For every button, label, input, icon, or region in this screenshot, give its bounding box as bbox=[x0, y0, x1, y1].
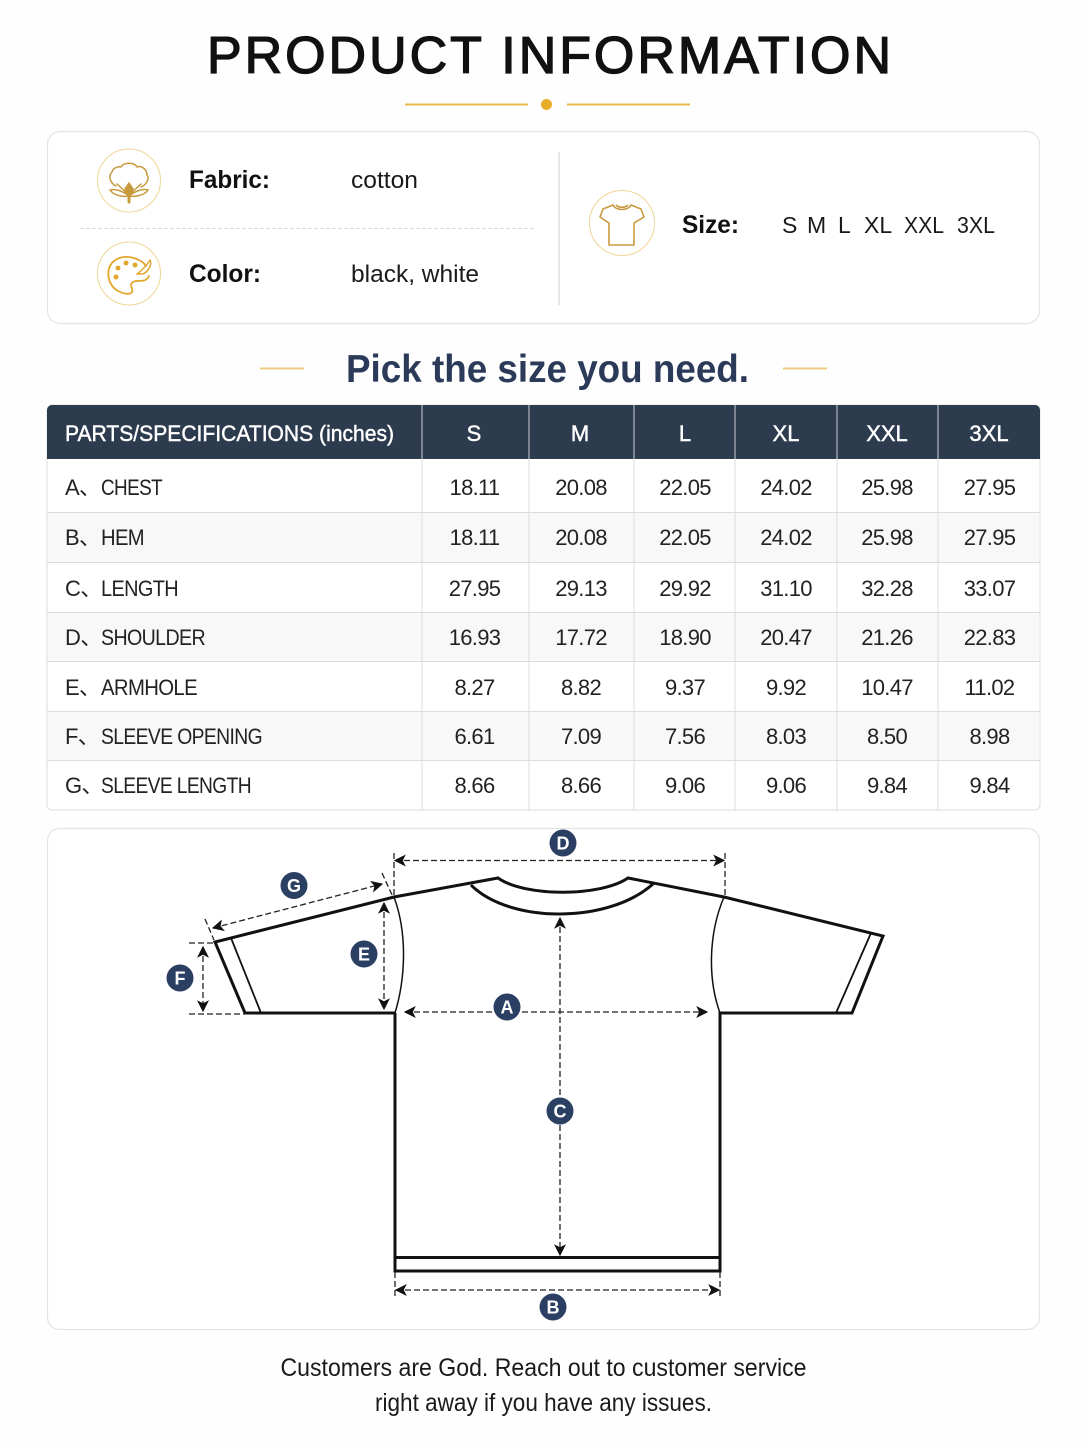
row: armhole: E、 bbox=[65, 675, 100, 700]
row: armhole: 10.47 bbox=[861, 675, 913, 700]
color label: Color: bbox=[189, 260, 261, 288]
row: chest: 24.02 bbox=[760, 475, 812, 500]
row: sleeve length: 8.66 bbox=[561, 773, 601, 798]
row: shoulder: 20.47 bbox=[760, 625, 812, 650]
row: hem: HEM bbox=[101, 525, 144, 550]
row: sleeve opening: 6.61 bbox=[454, 724, 495, 749]
dimension G: sleeve length bbox=[205, 872, 393, 940]
size values: XXL bbox=[904, 212, 944, 238]
row: hem: 24.02 bbox=[760, 525, 812, 550]
row: sleeve opening: 7.09 bbox=[561, 724, 601, 749]
row: armhole: 9.92 bbox=[766, 675, 806, 700]
row: chest: 22.05 bbox=[659, 475, 711, 500]
row: length: LENGTH bbox=[101, 576, 178, 601]
row: length: 32.28 bbox=[861, 576, 913, 601]
row: armhole: 11.02 bbox=[965, 675, 1015, 700]
size values: L bbox=[838, 212, 851, 238]
icon: t-shirt bbox=[590, 190, 654, 256]
row: armhole bbox=[65, 675, 1015, 700]
size values: S bbox=[782, 212, 797, 238]
row: chest: A、 bbox=[65, 475, 100, 500]
dimension G: sleeve length: G bbox=[287, 876, 301, 896]
dimension F: sleeve opening bbox=[166, 943, 245, 1014]
row: sleeve length: 9.06 bbox=[665, 773, 705, 798]
table row shading and grid bbox=[47, 459, 1040, 810]
row: hem: 25.98 bbox=[861, 525, 913, 550]
row: hem: 22.05 bbox=[659, 525, 711, 550]
size values: 3XL bbox=[957, 212, 995, 238]
size values: M bbox=[807, 212, 826, 238]
row: chest: 25.98 bbox=[861, 475, 913, 500]
footer note bbox=[280, 1354, 806, 1417]
heading: pick the size: Pick the size you need. bbox=[346, 348, 749, 391]
row: shoulder: 18.90 bbox=[659, 625, 711, 650]
panel: t-shirt diagram bbox=[48, 828, 1040, 1330]
row: sleeve length: 9.84 bbox=[867, 773, 907, 798]
dimension E: armhole: E bbox=[358, 944, 370, 964]
row: chest: 27.95 bbox=[964, 475, 1016, 500]
row: length: 31.10 bbox=[760, 576, 812, 601]
dimension D: shoulder: D bbox=[556, 834, 570, 854]
row: sleeve opening bbox=[65, 724, 1010, 749]
size label: Size: bbox=[682, 211, 739, 239]
row: sleeve opening: 7.56 bbox=[665, 724, 705, 749]
size table bbox=[47, 405, 1040, 810]
row: chest: 20.08 bbox=[555, 475, 607, 500]
table header row: L bbox=[679, 421, 691, 446]
row: armhole: ARMHOLE bbox=[101, 675, 197, 700]
row: shoulder: 22.83 bbox=[964, 625, 1016, 650]
dimension A: chest bbox=[405, 994, 707, 1020]
size values bbox=[782, 212, 995, 238]
table header row: 3XL bbox=[969, 421, 1009, 446]
row: sleeve length: 9.84 bbox=[969, 773, 1010, 798]
title divider ornament bbox=[405, 99, 690, 110]
row: length: C、 bbox=[65, 576, 102, 601]
row: shoulder: SHOULDER bbox=[101, 625, 205, 650]
row: length: 29.92 bbox=[659, 576, 711, 601]
size values: XL bbox=[864, 212, 892, 238]
row: sleeve length bbox=[65, 773, 1010, 798]
row: sleeve opening: SLEEVE OPENING bbox=[101, 724, 262, 749]
row: shoulder bbox=[65, 625, 1016, 650]
dimension F: sleeve opening: F bbox=[174, 968, 186, 988]
row: length: 33.07 bbox=[964, 576, 1016, 601]
row: sleeve opening: 8.50 bbox=[867, 724, 907, 749]
row: hem: 20.08 bbox=[555, 525, 607, 550]
footer note: Customers are God. Reach out to customer service bbox=[280, 1354, 806, 1382]
icon: palette bbox=[98, 242, 160, 305]
row: armhole: 9.37 bbox=[665, 675, 705, 700]
dimension C: length: C bbox=[554, 1102, 566, 1122]
row: armhole: 8.82 bbox=[561, 675, 601, 700]
row: shoulder: 21.26 bbox=[861, 625, 913, 650]
table header row bbox=[47, 405, 1040, 459]
row: hem: B、 bbox=[65, 525, 100, 550]
dimension E: armhole bbox=[350, 903, 384, 1009]
row: hem: 18.11 bbox=[450, 525, 500, 550]
icon: cotton bbox=[98, 149, 160, 212]
row: sleeve length: 8.66 bbox=[454, 773, 495, 798]
dimension B: hem bbox=[395, 1272, 720, 1320]
row: shoulder: 17.72 bbox=[555, 625, 607, 650]
table header row: XXL bbox=[866, 421, 908, 446]
table header row: XL bbox=[773, 421, 799, 446]
fabric label: Fabric: bbox=[189, 166, 270, 194]
footer note: right away if you have any issues. bbox=[375, 1389, 712, 1417]
row: sleeve opening: 8.03 bbox=[766, 724, 806, 749]
row: chest: CHEST bbox=[101, 475, 162, 500]
row: length: 29.13 bbox=[555, 576, 607, 601]
panel: product attributes bbox=[48, 132, 1040, 324]
row: sleeve length: 9.06 bbox=[766, 773, 806, 798]
row: sleeve length: G、 bbox=[65, 773, 103, 798]
t-shirt outline bbox=[215, 878, 883, 1271]
title: PRODUCT INFORMATION bbox=[207, 27, 891, 85]
row: shoulder: D、 bbox=[65, 625, 102, 650]
row: sleeve opening: F、 bbox=[65, 724, 99, 749]
dimension D: shoulder bbox=[394, 830, 725, 897]
table header row: S bbox=[467, 421, 481, 446]
row: shoulder: 16.93 bbox=[449, 625, 501, 650]
dimension A: chest: A bbox=[500, 998, 514, 1018]
row: armhole: 8.27 bbox=[454, 675, 495, 700]
row: hem bbox=[65, 525, 1016, 550]
row: chest bbox=[65, 475, 1016, 500]
row: length: 27.95 bbox=[449, 576, 501, 601]
fabric value: cotton bbox=[351, 167, 418, 194]
color value: black, white bbox=[351, 261, 479, 288]
row: chest: 18.11 bbox=[450, 475, 500, 500]
row: hem: 27.95 bbox=[964, 525, 1016, 550]
table header row: M bbox=[571, 421, 589, 446]
dimension B: hem: B bbox=[546, 1298, 560, 1318]
row: sleeve opening: 8.98 bbox=[969, 724, 1010, 749]
row: length bbox=[65, 576, 1016, 601]
table header row: PARTS/SPECIFICATIONS (inches) bbox=[65, 421, 394, 446]
row: sleeve length: SLEEVE LENGTH bbox=[101, 773, 251, 798]
dimension C: length bbox=[546, 918, 574, 1255]
